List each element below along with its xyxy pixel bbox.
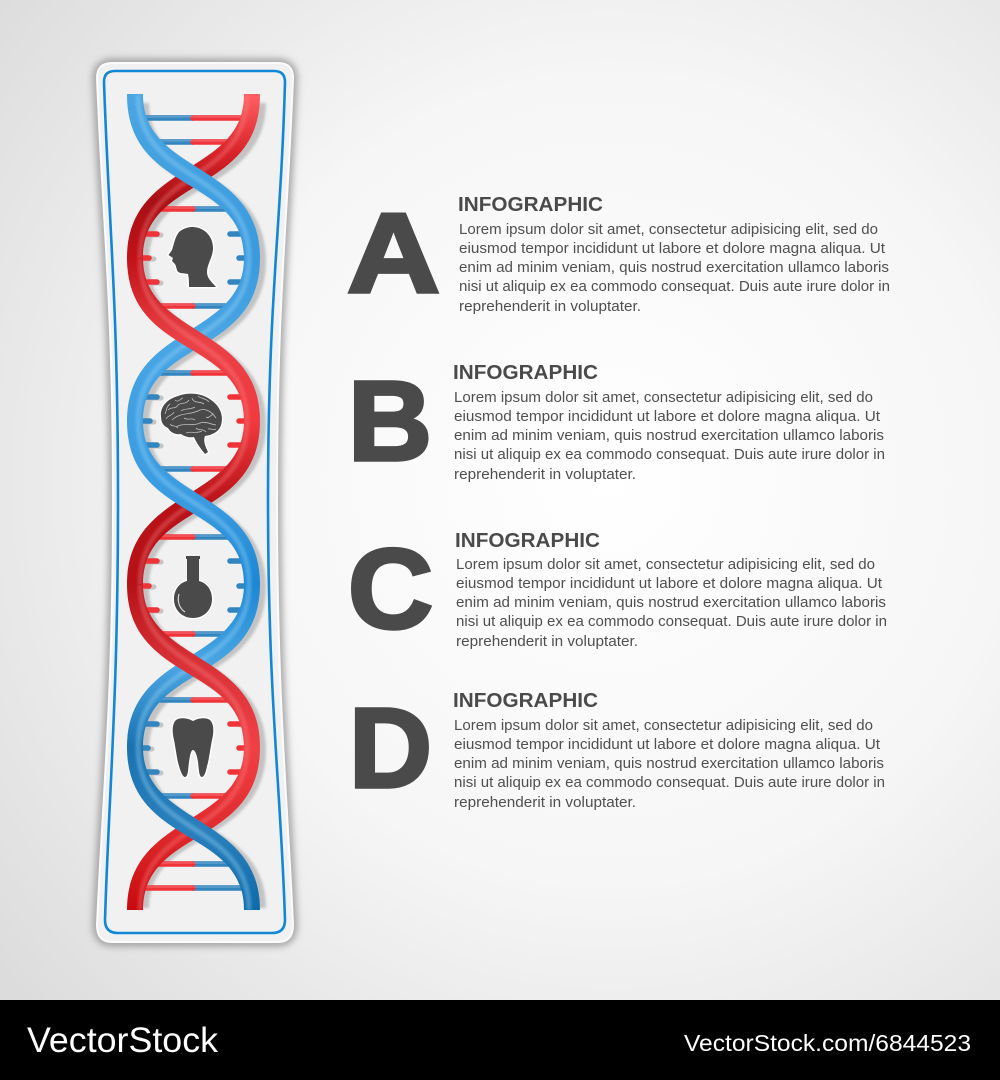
paragraph D: enim ad minim veniam, quis nostrud exercitation ullamco laboris bbox=[454, 755, 884, 772]
footer bar bbox=[0, 1000, 1000, 1080]
icon: brain bbox=[161, 394, 222, 454]
paragraph D: nisi ut aliquip ex ea commodo consequat. Duis aute irure dolor in bbox=[454, 774, 885, 791]
paragraph C: reprehenderit in voluptater. bbox=[456, 633, 638, 650]
paragraph A: eiusmod tempor incididunt ut labore et dolore magna aliqua. Ut bbox=[459, 240, 886, 257]
paragraph D: Lorem ipsum dolor sit amet, consectetur adipisicing elit, sed do bbox=[454, 717, 873, 734]
paragraph C: eiusmod tempor incididunt ut labore et dolore magna aliqua. Ut bbox=[456, 575, 883, 592]
DNA helix bbox=[127, 94, 260, 910]
icon: tooth bbox=[173, 718, 213, 777]
paragraph A: reprehenderit in voluptater. bbox=[459, 298, 641, 315]
heading A: INFOGRAPHIC bbox=[458, 194, 603, 216]
footer brand: VectorStock bbox=[27, 1021, 219, 1060]
block A text bbox=[458, 194, 890, 315]
heading B: INFOGRAPHIC bbox=[453, 362, 598, 384]
block C text bbox=[455, 530, 887, 650]
paragraph B: nisi ut aliquip ex ea commodo consequat. Duis aute irure dolor in bbox=[454, 446, 885, 463]
paragraph A: nisi ut aliquip ex ea commodo consequat. Duis aute irure dolor in bbox=[459, 278, 890, 295]
paragraph B: enim ad minim veniam, quis nostrud exercitation ullamco laboris bbox=[454, 427, 884, 444]
paragraph B: Lorem ipsum dolor sit amet, consectetur adipisicing elit, sed do bbox=[454, 389, 873, 406]
letter C: C bbox=[348, 526, 433, 652]
icon: human head bbox=[168, 227, 216, 287]
icon: flask bbox=[172, 556, 214, 620]
red strand, upper segments bbox=[127, 258, 260, 747]
paragraph B bbox=[454, 389, 885, 483]
paragraph D: reprehenderit in voluptater. bbox=[454, 794, 636, 811]
paragraph A: Lorem ipsum dolor sit amet, consectetur adipisicing elit, sed do bbox=[459, 221, 878, 238]
letter B: B bbox=[348, 358, 432, 484]
red strand, lower segments bbox=[127, 94, 260, 910]
panel: DNA card bbox=[97, 63, 293, 942]
strand shadow bbox=[140, 103, 257, 908]
rung shadows bbox=[143, 235, 161, 773]
blue strand bbox=[127, 94, 260, 910]
paragraph C: Lorem ipsum dolor sit amet, consectetur adipisicing elit, sed do bbox=[456, 556, 875, 573]
paragraph B: reprehenderit in voluptater. bbox=[454, 466, 636, 483]
footer image id: VectorStock.com/6844523 bbox=[684, 1030, 971, 1056]
heading D: INFOGRAPHIC bbox=[453, 690, 598, 712]
paragraph D: eiusmod tempor incididunt ut labore et dolore magna aliqua. Ut bbox=[454, 736, 881, 753]
letter D: D bbox=[349, 685, 432, 811]
paragraph D bbox=[454, 717, 885, 811]
heading C: INFOGRAPHIC bbox=[455, 530, 600, 552]
paragraph A bbox=[459, 221, 890, 315]
paragraph C bbox=[456, 556, 887, 650]
paragraph C: enim ad minim veniam, quis nostrud exercitation ullamco laboris bbox=[456, 594, 886, 611]
block B text bbox=[453, 362, 885, 483]
block D text bbox=[453, 690, 885, 811]
paragraph A: enim ad minim veniam, quis nostrud exercitation ullamco laboris bbox=[459, 259, 889, 276]
base pair rungs bbox=[138, 117, 249, 888]
letter A: A bbox=[347, 190, 440, 316]
paragraph B: eiusmod tempor incididunt ut labore et dolore magna aliqua. Ut bbox=[454, 408, 881, 425]
paragraph C: nisi ut aliquip ex ea commodo consequat. Duis aute irure dolor in bbox=[456, 613, 887, 630]
